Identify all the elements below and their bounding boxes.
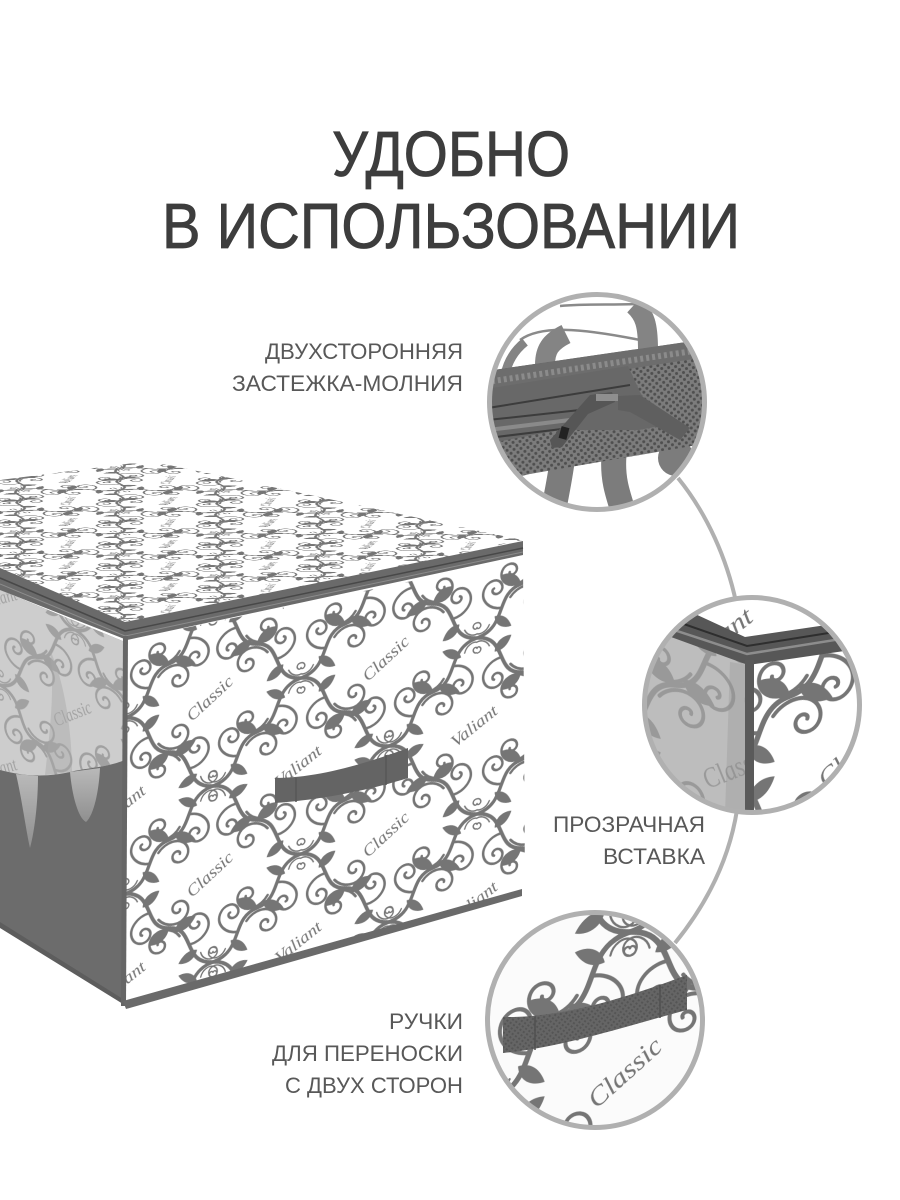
title: УДОБНО (332, 118, 570, 190)
label: transparent insert: ВСТАВКА (603, 844, 705, 869)
label: zipper (232, 339, 463, 396)
label: transparent insert: ПРОЗРАЧНАЯ (553, 812, 705, 837)
circle: handle close-up (480, 905, 710, 1135)
label: handles: ДЛЯ ПЕРЕНОСКИ (272, 1041, 463, 1066)
title (162, 118, 740, 262)
connector line: transparent insert to handles (675, 810, 737, 943)
zipper band (0, 541, 523, 640)
product: storage box (0, 461, 525, 1009)
transparent side window (0, 590, 125, 1005)
circle: corner close-up (640, 595, 865, 815)
label: zipper: ЗАСТЕЖКА-МОЛНИЯ (232, 371, 463, 396)
title: В ИСПОЛЬЗОВАНИИ (162, 190, 740, 262)
bottom binding (123, 889, 522, 1009)
label: handles: РУЧКИ (389, 1009, 463, 1034)
box front face with swirl pattern (124, 558, 525, 1005)
label: handles (272, 1009, 463, 1098)
box top face (0, 461, 522, 628)
callout: handles (272, 905, 710, 1135)
box handle (275, 748, 408, 803)
label: handles: С ДВУХ СТОРОН (285, 1073, 463, 1098)
vertical seam binding (121, 636, 128, 1006)
label: zipper: ДВУХСТОРОННЯЯ (265, 339, 463, 364)
label: transparent insert (553, 812, 705, 869)
circle: zipper close-up (487, 292, 707, 512)
connector line: zipper to transparent insert (678, 478, 736, 602)
callout: transparent insert (553, 595, 865, 869)
callout: two-way zipper (232, 290, 720, 520)
